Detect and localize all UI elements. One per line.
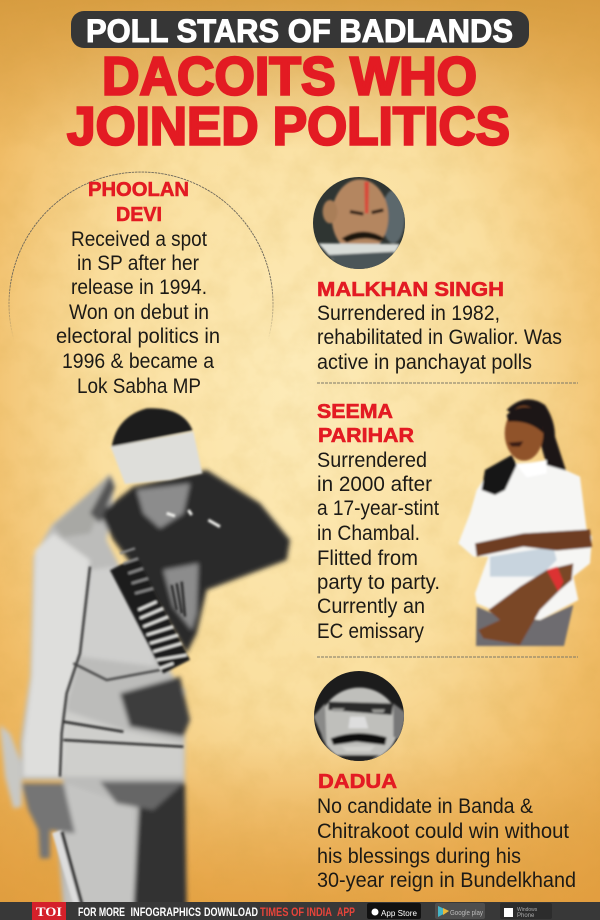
photo: Seema Parihar figure: [458, 399, 592, 646]
badge: Windows Phone: Phone: [517, 913, 535, 919]
footer call to action: [78, 905, 355, 919]
description: Phoolan Devi: [56, 227, 220, 398]
panel: Dadua text: [317, 770, 576, 892]
badge: App Store: [367, 903, 421, 919]
description: Seema Parihar: EC emissary: [317, 619, 424, 643]
name: Seema Parihar: SEEMA: [317, 400, 393, 423]
footer call to action: APP: [337, 905, 355, 919]
photo: Malkhan Singh portrait: [313, 177, 405, 270]
scalloped arc around Phoolan Devi text: [9, 172, 273, 340]
logo: TOI: TOI: [36, 905, 62, 919]
description: Malkhan Singh: active in panchayat polls: [317, 350, 532, 374]
description: Seema Parihar: a 17-year-stint: [317, 496, 439, 520]
description: Malkhan Singh: Surrendered in 1982,: [317, 301, 500, 325]
name: Seema Parihar: PARIHAR: [318, 424, 414, 447]
name: Seema Parihar: [317, 400, 414, 447]
description: Seema Parihar: Surrendered: [317, 448, 427, 472]
heading: dacoits who joined politics: DACOITS WHO: [102, 46, 477, 106]
heading: dacoits who joined politics: JOINED POLITICS: [67, 96, 510, 156]
name: Phoolan Devi: DEVI: [116, 203, 162, 226]
photo: Phoolan Devi figure: [0, 408, 290, 910]
badge: App Store: App Store: [381, 909, 418, 918]
description: Phoolan Devi: 1996 & became a: [62, 349, 214, 373]
description: Phoolan Devi: release in 1994.: [71, 275, 207, 299]
description: Phoolan Devi: electoral politics in: [56, 324, 220, 348]
description: Malkhan Singh: [317, 301, 562, 374]
description: Seema Parihar: [317, 448, 440, 643]
description: Seema Parihar: Flitted from: [317, 546, 418, 570]
description: Dadua: [317, 794, 576, 892]
description: Dadua: 30-year reign in Bundelkhand: [317, 868, 576, 892]
badge: Google play: Google play: [450, 908, 483, 917]
name: Dadua: DADUA: [318, 770, 397, 793]
description: Seema Parihar: party to party.: [317, 570, 440, 594]
footer bar: [0, 902, 600, 920]
logo: TOI: [32, 902, 66, 920]
photo: Dadua portrait: [313, 670, 407, 763]
description: Dadua: No candidate in Banda &: [317, 794, 533, 818]
footer call to action: TIMES OF INDIA: [260, 905, 332, 919]
panel: Seema Parihar text: [317, 400, 440, 643]
description: Malkhan Singh: rehabilitated in Gwalior. Was: [317, 325, 562, 349]
footer call to action: DOWNLOAD: [204, 905, 258, 919]
badge: Windows Phone: [500, 903, 552, 919]
description: Dadua: Chitrakoot could win without: [317, 819, 569, 843]
description: Phoolan Devi: Received a spot: [71, 227, 207, 251]
description: Phoolan Devi: in SP after her: [77, 251, 199, 275]
title banner: poll stars of badlands: POLL STARS OF BADLANDS: [86, 13, 513, 49]
description: Phoolan Devi: Lok Sabha MP: [77, 374, 201, 398]
name: Phoolan Devi: PHOOLAN: [88, 178, 189, 201]
description: Phoolan Devi: Won on debut in: [69, 300, 209, 324]
heading: dacoits who joined politics: [67, 46, 510, 156]
name: Phoolan Devi: [88, 178, 189, 226]
description: Seema Parihar: Currently an: [317, 594, 425, 618]
name: Malkhan Singh: MALKHAN SINGH: [317, 278, 504, 301]
footer call to action: INFOGRAPHICS: [130, 905, 201, 919]
panel: Malkhan Singh text: [317, 278, 562, 374]
description: Seema Parihar: in Chambal.: [317, 521, 420, 545]
footer call to action: FOR MORE: [78, 905, 125, 919]
badge: Windows Phone: Windows: [517, 907, 538, 913]
description: Dadua: his blessings during his: [317, 844, 521, 868]
description: Seema Parihar: in 2000 after: [317, 472, 432, 496]
badge: Google play: [435, 903, 485, 919]
panel: Phoolan Devi text: [56, 178, 220, 398]
